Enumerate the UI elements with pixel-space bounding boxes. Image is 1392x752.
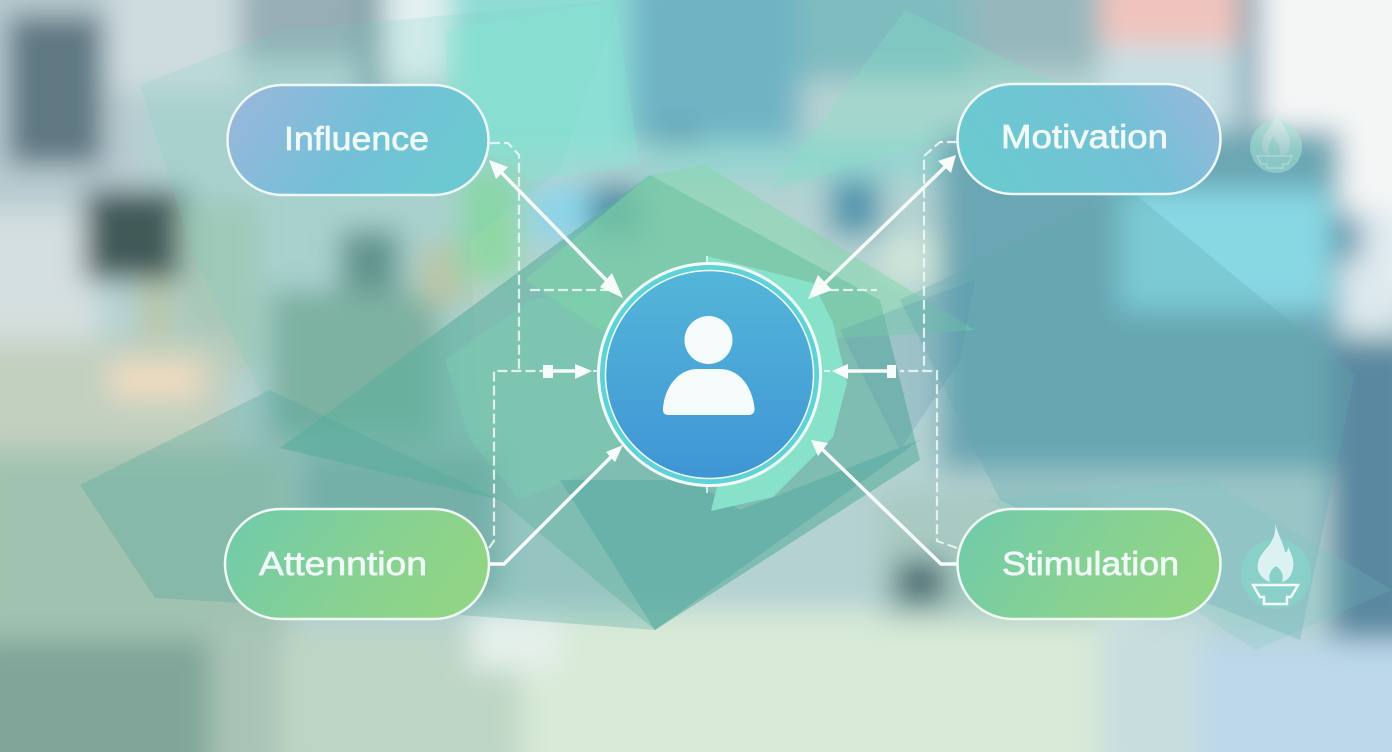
arrow: Motivation double-headed bbox=[808, 155, 956, 299]
arrow: Attention to centre bbox=[490, 445, 623, 564]
arrow: Influence double-headed bbox=[489, 160, 623, 298]
pill: Influence bbox=[228, 85, 488, 195]
centre circle bbox=[598, 256, 820, 493]
icon: person bbox=[663, 316, 755, 415]
pill: Influence: Influence bbox=[284, 120, 429, 157]
arrow: Stimulation to centre bbox=[811, 440, 957, 564]
pill: Stimulation: Stimulation bbox=[1002, 545, 1179, 582]
connector: Attention dashed route bbox=[489, 371, 545, 548]
connector: Influence dashed route bbox=[490, 143, 608, 371]
pill: Motivation bbox=[958, 84, 1220, 194]
pill: Attention: Attenntion bbox=[259, 545, 427, 582]
icon: flame bottom right bbox=[1241, 523, 1311, 609]
pill: Attention bbox=[225, 509, 489, 619]
arrow: left horizontal with node bbox=[543, 364, 598, 379]
arrow: right horizontal with node bbox=[824, 364, 896, 379]
connector: Motivation dashed route bbox=[815, 142, 957, 371]
connector: Stimulation dashed route bbox=[900, 371, 957, 548]
mint blob behind centre circle bbox=[707, 256, 847, 511]
pill: Motivation: Motivation bbox=[1001, 118, 1168, 155]
pill: Stimulation bbox=[958, 509, 1220, 619]
icon: faint flame top right bbox=[1250, 113, 1302, 173]
